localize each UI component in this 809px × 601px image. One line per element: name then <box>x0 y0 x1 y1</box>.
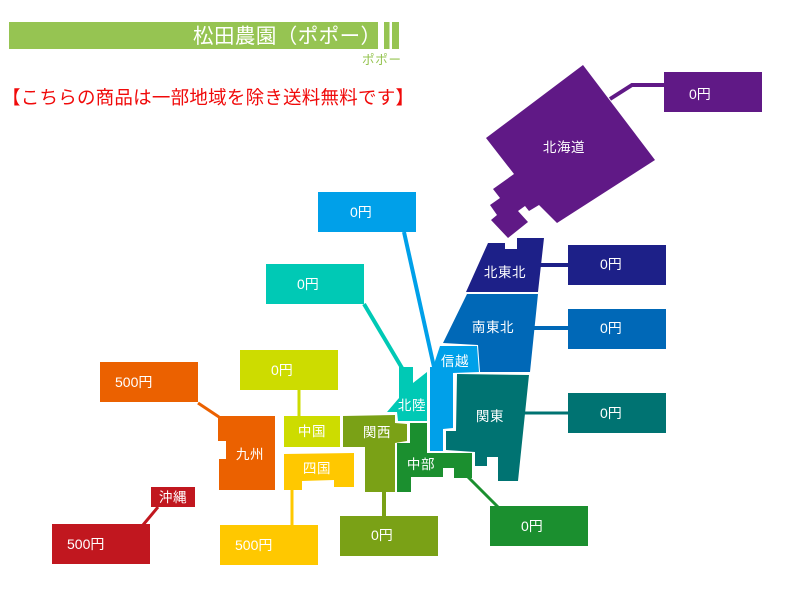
region: Okinawa <box>52 487 195 564</box>
title bar <box>9 22 399 49</box>
region: Kansai <box>340 415 438 556</box>
region: Okinawa: 500円 <box>67 536 104 552</box>
region: Minami-Tohoku: 0円 <box>600 320 622 336</box>
region: Shikoku: 500円 <box>235 537 272 553</box>
region: Shinetsu <box>318 192 479 451</box>
region: Shinetsu: 0円 <box>350 204 372 220</box>
region: Chugoku <box>240 350 340 447</box>
region: Okinawa: 沖縄 <box>159 490 187 505</box>
region: Hokkaido: 北海道 <box>543 140 585 155</box>
region: Minami-Tohoku: 南東北 <box>472 320 514 335</box>
region: Kita-Tohoku <box>466 238 666 292</box>
region: Kansai: 関西 <box>363 425 391 440</box>
region: Kita-Tohoku: 北東北 <box>484 265 526 280</box>
region: Chubu: 中部 <box>407 457 435 472</box>
subtitle: ポポー <box>362 53 401 67</box>
region: Shikoku: 四国 <box>303 461 331 476</box>
region: Chubu <box>397 423 588 546</box>
region: Hokkaido: 0円 <box>689 86 711 102</box>
region: Kanto: 0円 <box>600 405 622 421</box>
region: Shikoku <box>220 453 354 565</box>
region: Kyushu <box>100 362 275 490</box>
region: Chugoku: 中国 <box>298 424 326 439</box>
region: Chubu: 0円 <box>521 518 543 534</box>
region: Hokuriku: 0円 <box>297 276 319 292</box>
region: Minami-Tohoku <box>443 294 666 372</box>
region: Kanto <box>446 374 666 481</box>
shipping notice: 【こちらの商品は一部地域を除き送料無料です】 <box>2 87 414 108</box>
region: Kanto: 関東 <box>476 409 504 424</box>
region: Hokuriku <box>266 264 427 421</box>
region: Kyushu: 500円 <box>115 374 152 390</box>
region: Kyushu: 九州 <box>236 447 264 462</box>
region: Kansai: 0円 <box>371 527 393 543</box>
region: Chugoku: 0円 <box>271 362 293 378</box>
title bar: 松田農園（ポポー） <box>193 25 381 48</box>
region: Hokkaido <box>486 65 762 238</box>
region: Hokuriku: 北陸 <box>398 398 426 413</box>
region: Kita-Tohoku: 0円 <box>600 256 622 272</box>
region: Shinetsu: 信越 <box>441 354 469 369</box>
